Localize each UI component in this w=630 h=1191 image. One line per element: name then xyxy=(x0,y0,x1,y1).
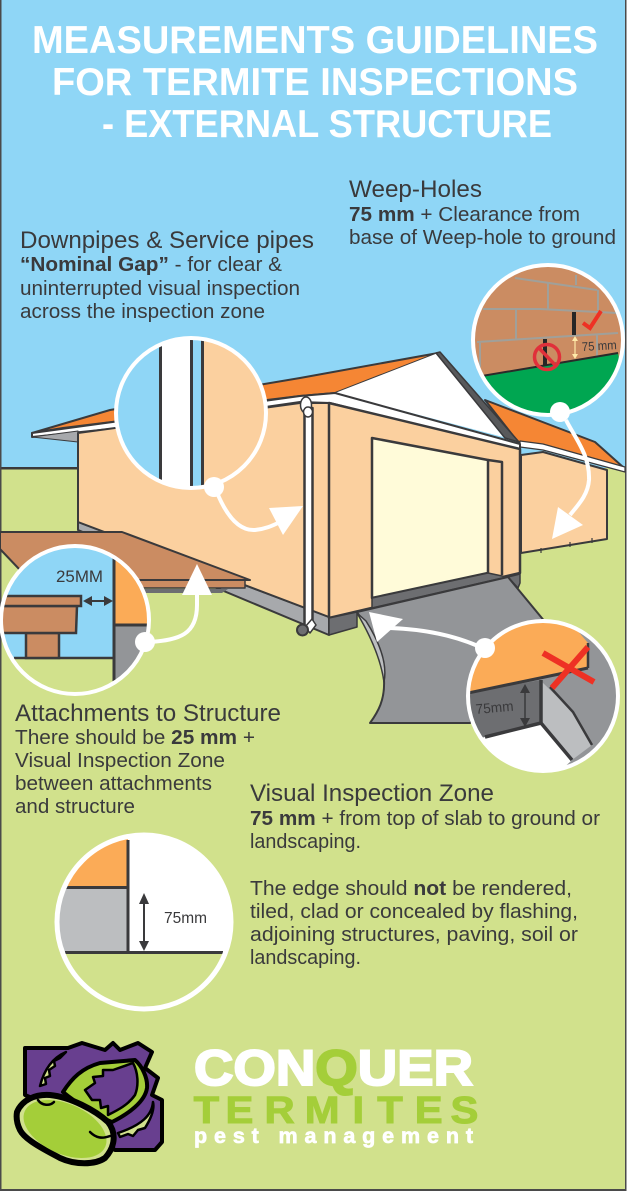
heading block: visual inspection zone xyxy=(250,780,600,969)
arrow: weep-holes xyxy=(550,402,589,539)
upper leaf xyxy=(63,1060,147,1122)
logo wordmark: pest management xyxy=(194,1124,473,1148)
heading block: visual inspection zone: Visual Inspection Zone xyxy=(250,780,494,807)
dimension: 75mm xyxy=(475,684,530,727)
dimension: 75mm: 75mm xyxy=(164,910,207,927)
title xyxy=(32,19,598,146)
heading block: visual inspection zone: The edge should not be rendered, xyxy=(250,878,572,900)
title: MEASUREMENTS GUIDELINES xyxy=(32,19,598,62)
heading block: visual inspection zone: 75 mm + from top of slab to ground or xyxy=(250,808,600,830)
left wing jagged band xyxy=(40,1052,66,1086)
dimension: 75mm xyxy=(139,893,207,951)
heading block: downpipes: uninterrupted visual inspection xyxy=(20,278,300,300)
purple backing xyxy=(25,1043,162,1150)
icon: prohibited sign xyxy=(534,344,560,370)
arrow: downpipe xyxy=(204,477,303,535)
heading block: downpipes xyxy=(20,227,314,323)
heading block: downpipes: “Nominal Gap” - for clear & xyxy=(20,254,283,276)
heading block: attachments: Visual Inspection Zone xyxy=(15,750,225,772)
logo icon xyxy=(15,1043,162,1170)
logo wordmark: TERMITES xyxy=(194,1090,478,1132)
dimension: 75mm: 75mm xyxy=(475,698,514,717)
circle: inspection zone detail xyxy=(50,834,240,1013)
main roof xyxy=(32,352,520,449)
right wing of house xyxy=(485,400,625,553)
white margin strip xyxy=(626,0,630,1191)
downpipe xyxy=(297,397,316,636)
heading block: attachments xyxy=(15,700,281,818)
heading block: visual inspection zone: adjoining structures, paving, soil or xyxy=(250,924,578,946)
heading block: weep-holes: 75 mm + Clearance from xyxy=(349,204,580,226)
heading block: downpipes: Downpipes & Service pipes xyxy=(20,227,314,254)
driveway slab xyxy=(357,577,560,723)
arrow: slab edge xyxy=(369,612,495,658)
dimension: 25MM: 25MM xyxy=(56,568,103,586)
dimension: 75 mm: 75 mm xyxy=(581,338,617,354)
dimension: 75 mm xyxy=(572,336,617,359)
garage front and door xyxy=(329,403,520,635)
right wing jagged band xyxy=(118,1102,153,1137)
house illustration xyxy=(0,352,625,723)
heading block: visual inspection zone: landscaping. xyxy=(250,947,361,969)
lower oval xyxy=(17,1095,114,1163)
circle: weep-holes detail xyxy=(470,265,630,420)
icon: red tick xyxy=(583,311,601,328)
title: FOR TERMITE INSPECTIONS xyxy=(52,61,578,104)
heading block: weep-holes xyxy=(349,176,616,249)
logo wordmark xyxy=(194,1040,478,1148)
timber deck xyxy=(0,532,250,600)
heading block: weep-holes: base of Weep-hole to ground xyxy=(349,227,616,249)
heading block: attachments: Attachments to Structure xyxy=(15,700,281,727)
logo wordmark: CONQUER xyxy=(194,1040,473,1096)
circle: slab edge detail xyxy=(466,619,620,773)
heading block: downpipes: across the inspection zone xyxy=(20,301,265,323)
heading block: attachments: and structure xyxy=(15,796,135,818)
heading block: attachments: between attachments xyxy=(15,773,212,795)
arrow: attachment xyxy=(135,564,212,652)
heading block: visual inspection zone: landscaping. xyxy=(250,831,361,853)
circle: downpipe detail xyxy=(110,335,266,495)
title: - EXTERNAL STRUCTURE xyxy=(102,103,552,146)
side wall and grey footing xyxy=(78,403,329,635)
heading block: weep-holes: Weep-Holes xyxy=(349,176,482,203)
heading block: attachments: There should be 25 mm + xyxy=(15,727,255,749)
icon: red cross xyxy=(543,647,594,688)
circle: attachment gap detail xyxy=(0,546,154,698)
dimension: 25MM xyxy=(56,568,113,606)
heading block: visual inspection zone: tiled, clad or concealed by flashing, xyxy=(250,901,578,923)
